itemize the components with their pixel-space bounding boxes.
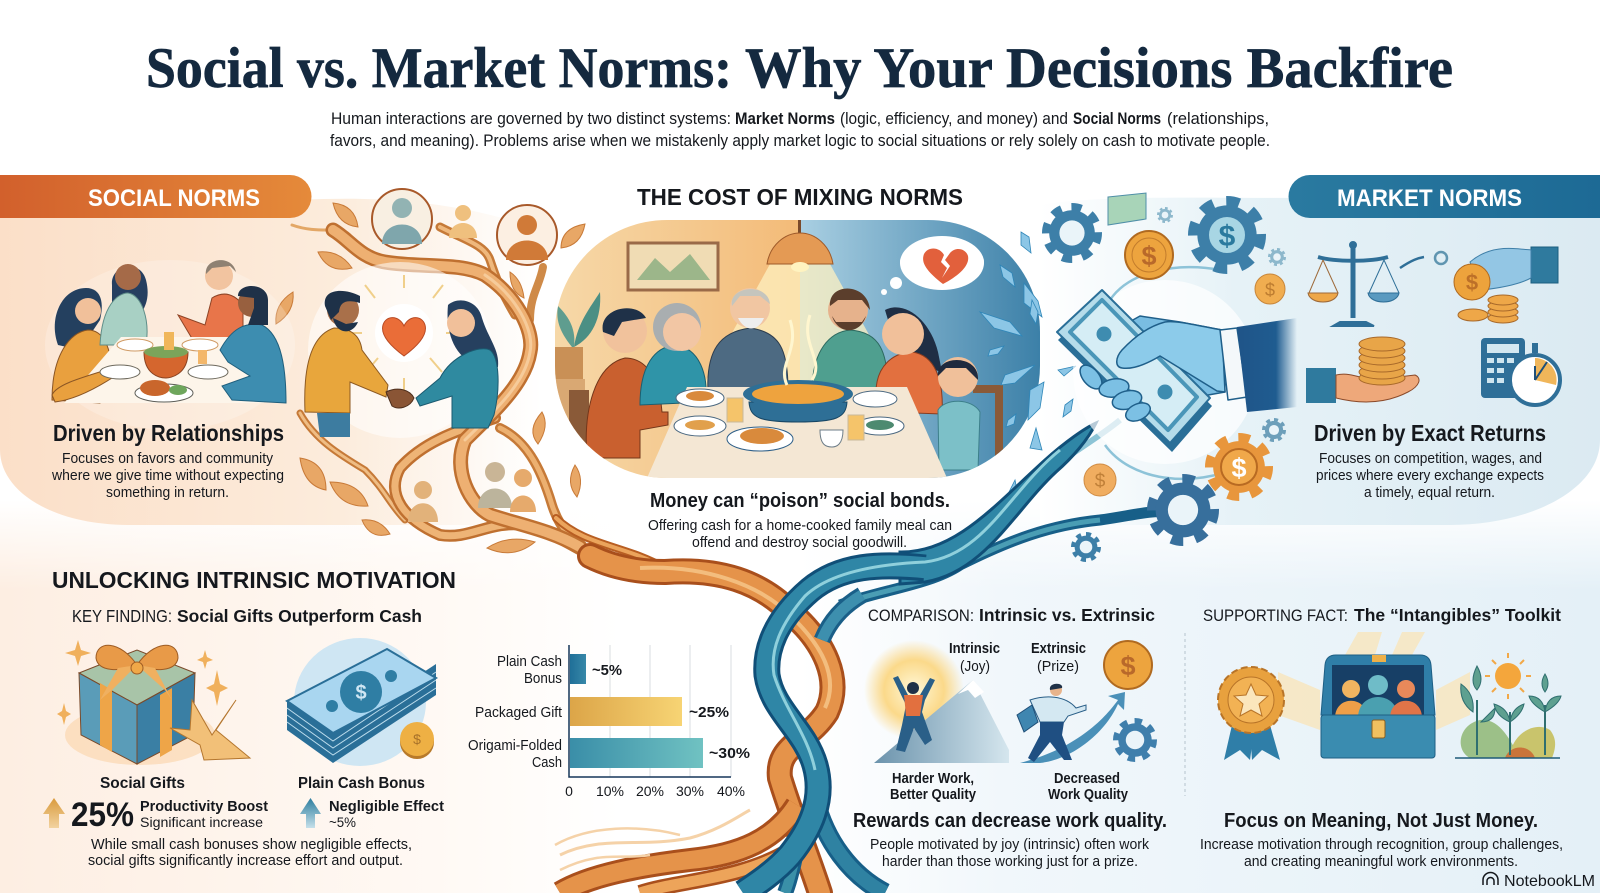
subheading: key finding: [72, 606, 422, 626]
text: focus on meaning: [1200, 810, 1563, 870]
left man: [586, 308, 668, 458]
bar chart: 10%: [596, 783, 624, 799]
bar chart: ~30%: [709, 745, 750, 762]
text: money can poison social bonds: Offering cash for a home-cooked family meal can: [648, 517, 952, 534]
text: driven by exact returns: Focuses on competition, wages, and: [1319, 450, 1542, 467]
icon: open hand with coin stack: [1306, 337, 1419, 403]
illustration: friends sharing a meal: [45, 260, 295, 430]
illustration: market gears and coins: $: [1141, 241, 1157, 271]
illustration: extrinsic runner chasing coin: [1017, 641, 1153, 763]
bar chart: 30%: [676, 783, 704, 799]
bar: origami cash: [570, 738, 703, 768]
pill: market norms: MARKET NORMS: [1337, 185, 1522, 212]
icon: balance scale: [1308, 242, 1447, 326]
icon: stack of cash and coin: $: [413, 731, 421, 747]
intro text: Market Norms: [735, 110, 835, 128]
pill: social norms: [0, 175, 312, 218]
intro text: (relationships,: [1167, 110, 1269, 128]
chairs: [569, 385, 1003, 456]
social gifts labels: 25%: [71, 796, 134, 834]
text: driven by relationships: Driven by Relationships: [53, 420, 284, 446]
pill: social norms: SOCIAL NORMS: [88, 185, 260, 212]
subheading: comparison: COMPARISON:: [868, 606, 974, 625]
labels: outcomes: [890, 771, 1128, 803]
bar chart: [468, 645, 750, 799]
subheading: supporting fact: The “Intangibles” Toolkit: [1354, 605, 1561, 625]
illustration: market gears and coins: $: [1095, 471, 1106, 492]
bar chart: Origami-Folded: [468, 738, 562, 754]
illustration: market gears and coins: [1047, 193, 1285, 560]
tree: leaves: [276, 203, 585, 553]
tree: central orange trunk: [555, 518, 832, 893]
text: driven by relationships: where we give time without expecting: [51, 467, 284, 484]
bar: plain cash: [570, 654, 586, 684]
grandmother: [640, 303, 706, 405]
text: driven by exact returns: Driven by Exact Returns: [1314, 420, 1546, 446]
text: driven by exact returns: prices where every exchange expects: [1316, 467, 1544, 484]
text: rewards can decrease work quality: People motivated by joy (intrinsic) often work: [870, 836, 1149, 853]
bar: packaged gift: [570, 697, 682, 726]
bar chart: ~25%: [689, 704, 729, 721]
subheading: comparison: Intrinsic vs. Extrinsic: [979, 605, 1155, 625]
labels: intrinsic and extrinsic: Extrinsic: [1031, 641, 1086, 657]
illustration: market gears and coins: $: [1231, 453, 1247, 483]
woman: [876, 307, 942, 414]
illustration: intangibles toolkit: [1218, 632, 1561, 760]
illustration: family dinner split scene: [555, 220, 1040, 478]
labels: intrinsic and extrinsic: Intrinsic: [949, 641, 1000, 657]
bar chart: 40%: [717, 783, 745, 799]
labels: outcomes: Work Quality: [1048, 787, 1128, 803]
tree: orange social branches: [292, 225, 600, 560]
labels: intrinsic and extrinsic: (Joy): [960, 659, 990, 675]
pill: market norms: [1288, 175, 1600, 218]
table with food: [647, 380, 947, 478]
text: focus on meaning: Increase motivation through recognition, group challenges,: [1200, 836, 1563, 853]
text: cash vs gifts summary: While small cash bonuses show negligible effects,: [91, 836, 412, 853]
bar chart: Cash: [532, 755, 562, 771]
intro text: favors, and meaning). Problems arise when we mistakenly apply market logic to social situations or rely solely on cash to motivate people.: [330, 132, 1270, 150]
subheading: comparison: [868, 605, 1155, 625]
illustration: hand holding cash: [1057, 290, 1297, 452]
bar chart: Bonus: [524, 671, 562, 687]
illustration: market gears and coins: $: [1219, 220, 1236, 253]
text: money can poison social bonds: [648, 489, 952, 551]
treasure chest: [1321, 655, 1435, 758]
text: cash vs gifts summary: social gifts significantly increase effort and output.: [88, 852, 403, 869]
panel: market norms background: [1040, 198, 1600, 525]
bar chart: ~5%: [592, 662, 622, 679]
panel: social norms background: [0, 199, 570, 525]
intro text: Social Norms: [1073, 110, 1161, 128]
social gifts labels: Productivity Boost: [140, 798, 268, 815]
grandfather: [708, 288, 788, 392]
icon: stack of cash and coin: $: [355, 682, 367, 704]
labels: outcomes: Harder Work,: [892, 771, 974, 787]
intro text: Human interactions are governed by two distinct systems:: [331, 110, 731, 128]
picture frame: [628, 243, 718, 290]
bar chart: 0: [565, 783, 573, 799]
text: driven by exact returns: [1314, 420, 1546, 501]
icons: community people in circles: [372, 189, 557, 522]
plain cash labels: ~5%: [329, 814, 356, 830]
icon: gift box and paper crane: [57, 640, 250, 765]
icon: calculator and stopwatch: [1481, 338, 1560, 405]
plain cash labels: [298, 775, 444, 830]
labels: intrinsic and extrinsic: [949, 641, 1086, 675]
social gifts labels: Social Gifts: [100, 775, 185, 792]
text: driven by relationships: Focuses on favors and community: [62, 450, 273, 467]
logo: NotebookLM: NotebookLM: [1504, 873, 1595, 890]
icon: hand placing coin on stacks: [1454, 247, 1558, 323]
heading: unlocking intrinsic motivation: UNLOCKING INTRINSIC MOTIVATION: [52, 567, 456, 593]
growing plants: [1461, 666, 1561, 758]
intro text: [330, 110, 1270, 150]
pendant lamp: [767, 220, 833, 272]
text: money can poison social bonds: offend and destroy social goodwill.: [692, 534, 907, 551]
labels: intrinsic and extrinsic: (Prize): [1037, 659, 1079, 675]
social gifts labels: [43, 775, 268, 834]
arrow up blue: [300, 798, 321, 828]
text: focus on meaning: and creating meaningful work environments.: [1244, 853, 1518, 870]
bar chart: Packaged Gift: [475, 705, 562, 721]
title: Social vs. Market Norms:: [146, 37, 732, 100]
potted plant: [555, 292, 600, 429]
text: money can poison social bonds: Money can “poison” social bonds.: [650, 489, 950, 512]
text: rewards can decrease work quality: [853, 810, 1167, 870]
labels: outcomes: Decreased: [1054, 771, 1120, 787]
thought bubble with broken heart: [881, 236, 984, 295]
labels: outcomes: Better Quality: [890, 787, 976, 803]
plain cash labels: Negligible Effect: [329, 798, 444, 815]
text: rewards can decrease work quality: Rewards can decrease work quality.: [853, 810, 1167, 832]
medal: [1218, 667, 1284, 760]
arrow up gold: [43, 798, 65, 828]
text: focus on meaning: Focus on Meaning, Not Just Money.: [1224, 810, 1538, 832]
text: driven by exact returns: a timely, equal return.: [1364, 484, 1495, 501]
text: cash vs gifts summary: [88, 836, 412, 869]
bar chart: 20%: [636, 783, 664, 799]
heading: cost of mixing norms: THE COST OF MIXING NORMS: [637, 184, 963, 210]
title: [146, 37, 1453, 100]
shattered glass shards: [980, 232, 1076, 518]
subheading: key finding: Social Gifts Outperform Cash: [177, 606, 422, 626]
title: Why Your Decisions Backfire: [745, 37, 1453, 100]
tree: central and market blue branches: [743, 420, 1168, 893]
subheading: supporting fact: SUPPORTING FACT:: [1203, 606, 1348, 625]
divider: [1184, 633, 1186, 796]
illustration: handshake with heart: [305, 262, 498, 438]
illustration: intrinsic climber: [864, 640, 1009, 763]
boy: [938, 357, 980, 470]
illustration: market gears and coins: $: [1265, 280, 1275, 300]
plain cash labels: Plain Cash Bonus: [298, 775, 425, 792]
illustration: extrinsic runner chasing coin: $: [1120, 651, 1136, 681]
steam: [784, 315, 816, 385]
text: driven by relationships: something in return.: [106, 484, 229, 501]
social gifts labels: Significant increase: [140, 814, 263, 830]
text: rewards can decrease work quality: harder than those working just for a prize.: [882, 853, 1138, 870]
subheading: key finding: KEY FINDING:: [72, 606, 172, 626]
sun: [1485, 653, 1531, 699]
subheading: supporting fact: [1203, 605, 1561, 625]
icon: hand placing coin on stacks: $: [1466, 270, 1478, 295]
intro text: (logic, efficiency, and money) and: [840, 110, 1068, 128]
bearded man: [812, 288, 888, 392]
text: driven by relationships: [51, 420, 284, 501]
icon: stack of cash and coin: [287, 638, 436, 766]
bar chart: Plain Cash: [497, 654, 562, 670]
